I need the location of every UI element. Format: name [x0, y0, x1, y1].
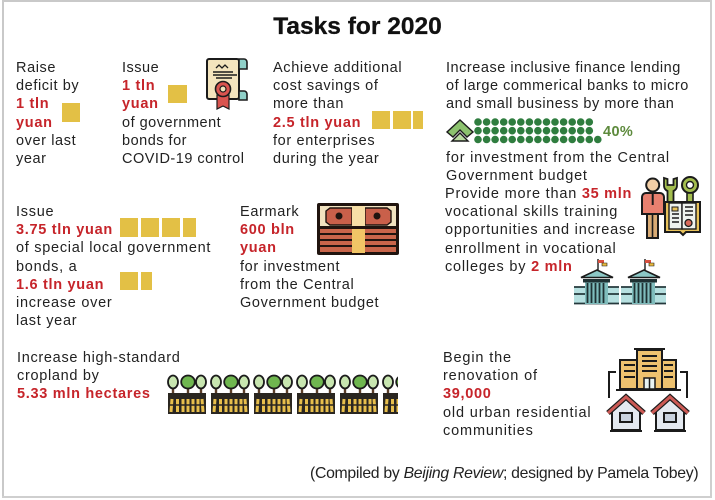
text: vocational training: enrollment in vocational — [445, 241, 617, 257]
text: earmark: 600 bln — [240, 222, 295, 238]
text: raise deficit: yuan — [16, 115, 53, 131]
text: raise deficit: deficit by — [16, 78, 79, 94]
label: 40 percent: 40% — [603, 124, 633, 140]
text: inclusive finance: Increase inclusive finance lending — [446, 60, 681, 76]
text: raise deficit: year — [16, 151, 47, 167]
text: urban renovation: communities — [443, 423, 534, 439]
text: cost savings: more than — [273, 96, 344, 112]
icon: cropland row — [167, 374, 398, 414]
text: cost savings: during the year — [273, 151, 379, 167]
text: vocational training: colleges by 2 mln — [445, 259, 573, 275]
text: cropland: cropland by — [17, 368, 100, 384]
text: government bonds: of government — [122, 115, 221, 131]
text: earmark: Earmark — [240, 204, 299, 220]
text: government bonds: Issue — [122, 60, 159, 76]
icon: increase squares — [120, 272, 152, 290]
text: urban renovation: 39,000 — [443, 386, 492, 402]
text: vocational training: Provide more than 35 mln — [445, 186, 632, 202]
text: earmark: for investment — [240, 259, 340, 275]
text: special local bonds: bonds, a — [16, 259, 77, 275]
text: special local bonds: of special local government — [16, 240, 211, 256]
text: inclusive finance — [446, 60, 689, 112]
text: investment from central budget — [446, 150, 670, 184]
icon: college buildings — [574, 259, 666, 304]
text: special local bonds: 1.6 tln yuan — [16, 277, 104, 293]
icon: deficit square — [62, 103, 80, 122]
icon: banknotes — [317, 203, 399, 255]
text: earmark: from the Central — [240, 277, 354, 293]
text: cost savings — [273, 60, 402, 167]
text: vocational training: vocational skills training — [445, 204, 618, 220]
text: urban renovation: Begin the — [443, 350, 512, 366]
text: inclusive finance: of large commerical banks to micro — [446, 78, 689, 94]
text: raise deficit: Raise — [16, 60, 56, 76]
text: cropland: Increase high-standard — [17, 350, 180, 366]
text: investment from central budget: for investment from the Central — [446, 150, 670, 166]
text: raise deficit: 1 tln — [16, 96, 49, 112]
text: investment from central budget: Government budget — [446, 168, 588, 184]
text: cost savings: for enterprises — [273, 133, 375, 149]
text: government bonds: yuan — [122, 96, 159, 112]
icon: upward arrows — [446, 119, 474, 142]
credit: (Compiled by Beijing Review; designed by Pamela Tobey) — [310, 465, 698, 482]
text: cost savings: cost savings of — [273, 78, 379, 94]
text: raise deficit — [16, 60, 79, 167]
icon: bond square — [168, 85, 187, 103]
text: urban renovation: old urban residential — [443, 405, 591, 421]
icon: certificate — [206, 58, 248, 110]
text: government bonds: 1 tln — [122, 78, 155, 94]
text: cost savings: 2.5 tln yuan — [273, 115, 361, 131]
text: special local bonds: 3.75 tln yuan — [16, 222, 113, 238]
text: inclusive finance: and small business by more than — [446, 96, 674, 112]
text: vocational training: opportunities and increase — [445, 222, 636, 238]
text: government bonds: bonds for — [122, 133, 187, 149]
text: raise deficit: over last — [16, 133, 76, 149]
chart: 40 percent dots — [474, 118, 602, 144]
icon: urban buildings and houses — [606, 348, 690, 432]
text: cropland: 5.33 mln hectares — [17, 386, 151, 402]
text: earmark: yuan — [240, 240, 277, 256]
text: urban renovation: renovation of — [443, 368, 538, 384]
text: special local bonds: Issue — [16, 204, 54, 220]
text: special local bonds — [16, 204, 211, 329]
title: Tasks for 2020 — [273, 13, 442, 40]
icon: cost savings squares — [372, 111, 423, 129]
text: government bonds — [122, 60, 244, 167]
text: earmark: Government budget — [240, 295, 379, 311]
text: cost savings: Achieve additional — [273, 60, 402, 76]
text: earmark — [240, 204, 379, 311]
text: vocational training — [445, 186, 636, 275]
text: cropland — [17, 350, 180, 402]
text: special local bonds: last year — [16, 313, 77, 329]
text: special local bonds: increase over — [16, 295, 112, 311]
icon: vocational training — [641, 176, 701, 239]
icon: special bond squares — [120, 218, 196, 237]
text: government bonds: COVID-19 control — [122, 151, 244, 167]
text: urban renovation — [443, 350, 591, 439]
